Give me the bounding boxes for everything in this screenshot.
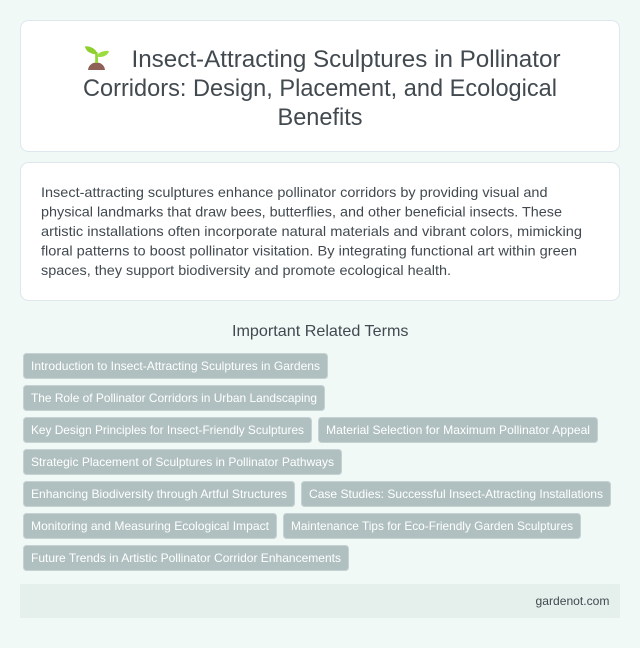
footer: gardenot.com [536,594,610,608]
tag [24,546,348,570]
summary text [41,184,582,278]
tag [24,386,324,410]
tag [24,354,328,378]
tag: Maintenance Tips for Eco-Friendly Garden Sculptures [291,519,573,533]
tag: Material Selection for Maximum Pollinator Appeal [326,423,590,437]
tag: Future Trends in Artistic Pollinator Corridor Enhancements [31,551,341,565]
summary text: Insect-attracting sculptures enhance pollinator corridors by providing visual and [41,184,548,200]
heading: related terms: Important Related Terms [232,323,408,340]
panel: title card [20,20,620,152]
tag: The Role of Pollinator Corridors in Urban Landscaping [31,391,317,405]
tag: Introduction to Insect-Attracting Sculptures in Gardens [31,359,320,373]
tag: Strategic Placement of Sculptures in Pollinator Pathways [31,455,334,469]
tag [302,482,610,506]
summary text: floral patterns to boost pollinator visitation. By integrating functional art within green [41,242,577,258]
tag [318,418,598,442]
title [83,46,561,131]
tag [284,514,580,538]
tag [24,418,312,442]
tag: Enhancing Biodiversity through Artful Structures [31,487,287,501]
tag: Monitoring and Measuring Ecological Impact [31,519,270,533]
summary text: physical landmarks that draw bees, butterflies, and other beneficial insects. These [41,204,562,220]
tag [24,450,342,474]
title: Benefits [278,104,362,131]
summary text: spaces, they support biodiversity and promote ecological health. [41,262,451,278]
tag [24,482,294,506]
tag: Key Design Principles for Insect-Friendly Sculptures [31,423,304,437]
footer [20,584,620,618]
title: Insect-Attracting Sculptures in Pollinator [132,46,561,73]
tag [24,514,276,538]
tag list [24,354,610,570]
panel: summary [20,162,620,300]
title: Corridors: Design, Placement, and Ecological [83,75,557,102]
icon: seedling [85,46,109,70]
summary text: artistic installations often incorporate natural materials and vibrant colors, mimicking [41,223,582,239]
tag: Case Studies: Successful Insect-Attracting Installations [309,487,603,501]
